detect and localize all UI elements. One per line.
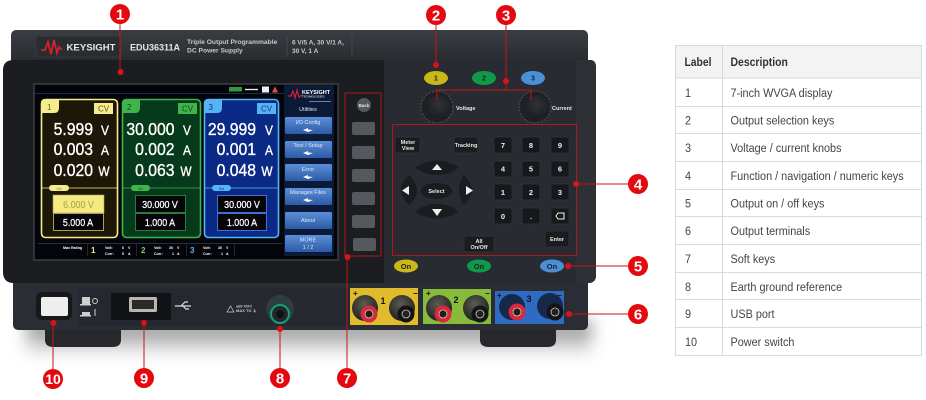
callout 10 — [43, 320, 63, 389]
sidebar logo: TECHNOLOGIES — [302, 94, 325, 98]
callout 1: 1 — [116, 6, 124, 24]
numeric keys: . — [530, 212, 532, 221]
top strip — [11, 30, 588, 70]
callout 5 — [565, 256, 648, 276]
callout 1 — [110, 4, 130, 75]
max rating strip: V — [177, 246, 180, 250]
product description: Triple Output Programmable — [187, 39, 278, 46]
power symbols — [80, 297, 98, 316]
numeric keys: 9 — [558, 141, 562, 150]
channel 1 card — [41, 99, 118, 238]
header labels — [684, 56, 788, 69]
right grip — [576, 60, 596, 283]
channel 2 setpoints — [136, 196, 186, 230]
channel 1 setpoints — [53, 195, 104, 230]
callout 7 — [337, 254, 357, 388]
channel 2 set pill: Set — [138, 187, 143, 191]
max rating strip: Curr: — [154, 252, 163, 256]
numeric keys: 8 — [529, 141, 533, 150]
channel 3 card — [204, 99, 278, 238]
channel 1 readings: W — [98, 163, 110, 179]
legend table — [676, 46, 922, 356]
sidebar button: Error: Error — [302, 167, 314, 173]
earth ground terminal — [266, 295, 294, 323]
channel 2 card — [122, 99, 200, 238]
function keys: Enter — [550, 237, 565, 243]
callout 2 — [426, 5, 446, 68]
earth warning label: MAX TO ⏚ — [236, 307, 257, 313]
callout 7: 7 — [343, 370, 351, 388]
status icons — [229, 86, 278, 92]
channel 3 readings: A — [265, 142, 273, 158]
max rating strip: A — [226, 252, 229, 256]
callout 6: 6 — [634, 306, 642, 324]
channel 1 setpoints: 6.000 V — [63, 199, 94, 211]
display — [34, 84, 338, 260]
sidebar — [284, 85, 334, 256]
row 7: Soft keys — [730, 254, 775, 266]
channel 2 readings — [126, 119, 192, 180]
max rating strip — [38, 244, 282, 256]
row 3: Voltage / current knobs — [730, 143, 842, 155]
row 2 — [685, 115, 835, 128]
voltage knob — [421, 91, 475, 123]
channel 1 set pill: Set — [56, 187, 62, 191]
output on keys: On — [547, 262, 558, 271]
callout 9 — [134, 320, 154, 388]
table header — [676, 46, 922, 78]
navigation keys: Select — [428, 189, 445, 195]
row 1 — [685, 88, 833, 100]
numeric keys: 3 — [558, 188, 562, 197]
output selection keys: 1 — [434, 76, 438, 82]
output terminal 2: − — [485, 289, 490, 298]
channel 3 readings: V — [265, 122, 273, 138]
output terminal 3: − — [557, 291, 562, 300]
row 6 — [685, 226, 810, 238]
max rating strip: V — [128, 246, 131, 250]
row 10 — [685, 337, 794, 349]
row 3: 3 — [685, 143, 691, 155]
output on keys — [394, 260, 564, 272]
callout 8 — [270, 326, 290, 388]
model number: EDU36311A — [130, 42, 181, 52]
max rating strip: Curr: — [203, 252, 212, 256]
numeric keys: 2 — [529, 188, 533, 197]
channel 3 setpoints: 30.000 V — [224, 199, 260, 211]
row 10: Power switch — [730, 337, 794, 349]
output terminal 2: + — [426, 289, 431, 298]
callout 3 — [437, 5, 531, 100]
output terminal 1: + — [353, 289, 358, 298]
row 1: 7-inch WVGA display — [730, 88, 833, 100]
callout highlight: soft keys box — [345, 93, 381, 256]
numeric keys: 1 — [501, 188, 505, 197]
channel 2 readings: W — [180, 163, 192, 179]
control panel background — [384, 60, 596, 283]
channel 2 readings: 0.063 — [135, 160, 174, 180]
output terminal 2 — [423, 289, 491, 324]
front bezel — [3, 60, 596, 283]
sidebar button: Manages Files — [285, 188, 332, 205]
output on keys: On — [401, 262, 412, 271]
function keys: View — [402, 146, 415, 152]
channel 3 setpoints: 1.000 A — [227, 217, 258, 229]
numeric keys: 4 — [501, 164, 506, 174]
channel 3 readings: 29.999 — [208, 119, 256, 139]
row 4: 4 — [685, 171, 692, 183]
earth warning label — [227, 304, 257, 313]
sidebar button: Error — [285, 164, 332, 181]
table grid — [676, 46, 922, 356]
output selection keys: 3 — [531, 76, 535, 82]
max rating strip: Curr: — [105, 252, 114, 256]
output terminal 2: 2 — [453, 295, 459, 305]
channel 2 readings: V — [183, 122, 191, 138]
channel 3 readings: W — [261, 163, 273, 179]
output selection keys: 2 — [482, 76, 486, 82]
sidebar button: About — [285, 212, 332, 229]
power switch — [36, 292, 72, 320]
callout 5: 5 — [634, 258, 642, 276]
max rating strip: A — [177, 252, 180, 256]
function keys — [395, 137, 569, 252]
channel 2 card: CV — [182, 104, 194, 114]
output terminal 1: − — [413, 289, 418, 298]
callout 8: 8 — [276, 370, 284, 388]
max rating strip: V — [226, 246, 229, 250]
lower panel inset — [78, 288, 350, 326]
channel 1 setpoints: 5.000 A — [63, 217, 94, 229]
output on keys: On — [474, 262, 485, 271]
numeric keys: 7 — [501, 141, 505, 150]
row 7: 7 — [685, 254, 691, 266]
left foot — [45, 326, 121, 347]
max rating strip: 1 — [91, 246, 96, 255]
max rating strip: 3 — [190, 246, 195, 255]
channel 2 setpoints: 30.000 V — [142, 199, 178, 211]
callout 10: 10 — [45, 371, 61, 387]
channel 1 readings: 5.999 — [54, 119, 93, 139]
channel 3 setpoints — [218, 196, 266, 230]
output ratings: 6 V/5 A, 30 V/1 A, — [292, 40, 344, 46]
sidebar button: More: 1 / 2 — [303, 245, 313, 251]
max rating strip: 1 — [221, 252, 223, 256]
channel 1 readings: 0.020 — [54, 160, 93, 180]
channel 3 readings: 0.048 — [217, 160, 256, 180]
navigation keys — [401, 160, 473, 218]
channel 1 card: 1 — [47, 103, 52, 112]
function keys: On/Off — [470, 245, 488, 251]
output terminal 1 — [350, 288, 418, 325]
sidebar button: Manages Files: Manages Files — [290, 190, 326, 196]
current knob — [519, 91, 572, 123]
max rating strip: Max Rating — [63, 246, 82, 250]
channel 3 card: 3 — [208, 103, 214, 112]
sidebar button: I/O Config: I/O Config — [296, 120, 320, 126]
row 5: Output on / off keys — [730, 198, 825, 211]
row 6: Output terminals — [730, 226, 810, 238]
power supply instrument — [3, 30, 596, 347]
channel 1 readings: 0.003 — [54, 139, 93, 159]
earth warning label: ±60 VDC — [236, 304, 252, 308]
max rating strip: Volt: — [105, 246, 113, 250]
output terminal 3 — [495, 291, 564, 324]
max rating strip: A — [128, 252, 131, 256]
row 9: USB port — [730, 309, 775, 321]
row 8: 8 — [685, 282, 691, 294]
usb port — [111, 293, 171, 320]
sidebar button: About: About — [301, 218, 316, 224]
callout 6 — [566, 304, 648, 324]
sidebar button: Test / Setup — [285, 141, 332, 158]
max rating strip: 2 — [141, 246, 146, 255]
callout 4: 4 — [634, 176, 643, 194]
row 8: Earth ground reference — [730, 282, 842, 294]
max rating strip: Volt: — [154, 246, 162, 250]
channel 2 readings: 0.002 — [135, 139, 174, 159]
max rating strip: 30 — [169, 246, 173, 250]
sidebar button: More: MORE — [300, 238, 317, 244]
channel 2 readings: A — [183, 142, 191, 158]
max rating strip: 6 — [122, 246, 124, 250]
keysight logo — [41, 40, 62, 54]
output terminal 1: 1 — [380, 296, 386, 306]
channel 1 readings — [54, 119, 110, 180]
row 5 — [685, 198, 825, 211]
max rating strip: 1 — [172, 252, 174, 256]
header labels: Label — [684, 56, 711, 69]
channel 1 readings: A — [101, 142, 109, 158]
callout highlight: keypad box — [392, 124, 576, 256]
lower body — [13, 275, 588, 330]
output terminal 3: + — [497, 291, 502, 300]
output ratings: 30 V, 1 A — [292, 48, 319, 55]
current knob: Current — [552, 106, 572, 112]
callout 3: 3 — [502, 8, 510, 24]
row 4: Function / navigation / numeric keys — [730, 171, 904, 183]
row 9: 9 — [685, 309, 691, 321]
usb symbol — [175, 302, 191, 309]
device shadow — [26, 322, 592, 358]
channel 3 set pill: Set — [219, 187, 224, 191]
row 2: Output selection keys — [730, 115, 835, 128]
numeric keys: 5 — [529, 164, 533, 174]
right foot — [480, 326, 556, 347]
brand name: KEYSIGHT — [66, 42, 116, 54]
callout 2: 2 — [432, 8, 440, 24]
max rating strip: 5 — [122, 252, 124, 256]
sidebar logo: KEYSIGHT — [302, 90, 331, 96]
numeric keys — [494, 137, 569, 224]
function keys: Meter — [401, 140, 416, 146]
header labels: Description — [730, 56, 788, 69]
output terminal 3: 3 — [526, 294, 532, 304]
channel 1 readings: V — [101, 122, 109, 138]
max rating strip: Volt: — [203, 246, 211, 250]
channel 2 card: 2 — [127, 103, 132, 112]
sidebar logo — [288, 90, 331, 102]
voltage knob: Voltage — [456, 106, 475, 112]
callout 9: 9 — [140, 370, 148, 388]
soft keys: Back — [359, 103, 370, 108]
row 10: 10 — [685, 337, 697, 349]
row 5: 5 — [685, 198, 691, 211]
channel 2 readings: 30.000 — [126, 119, 174, 139]
function keys: Tracking — [455, 143, 477, 149]
channel 3 readings: 0.001 — [217, 139, 256, 159]
product description: DC Power Supply — [187, 48, 243, 54]
sidebar title: Utilities — [299, 107, 317, 113]
sidebar button: I/O Config — [285, 117, 332, 134]
function keys: All — [475, 239, 483, 245]
numeric keys: 0 — [501, 212, 505, 221]
channel 2 setpoints: 1.000 A — [145, 217, 176, 229]
output selection keys — [424, 71, 545, 85]
channel 3 card: CV — [261, 104, 273, 114]
row 6: 6 — [685, 226, 691, 238]
row 1: 1 — [685, 88, 691, 100]
sidebar button: Test / Setup: Test / Setup — [293, 143, 323, 149]
channel 3 readings — [208, 119, 273, 180]
numeric keys: 6 — [558, 164, 562, 174]
channel 1 card: CV — [98, 104, 110, 114]
soft keys — [352, 98, 376, 251]
callout 4 — [573, 174, 648, 194]
row 9 — [685, 309, 775, 321]
sidebar button: More — [285, 235, 332, 252]
row 7 — [685, 254, 775, 266]
max rating strip: 30 — [218, 246, 222, 250]
row 2: 2 — [685, 115, 691, 128]
